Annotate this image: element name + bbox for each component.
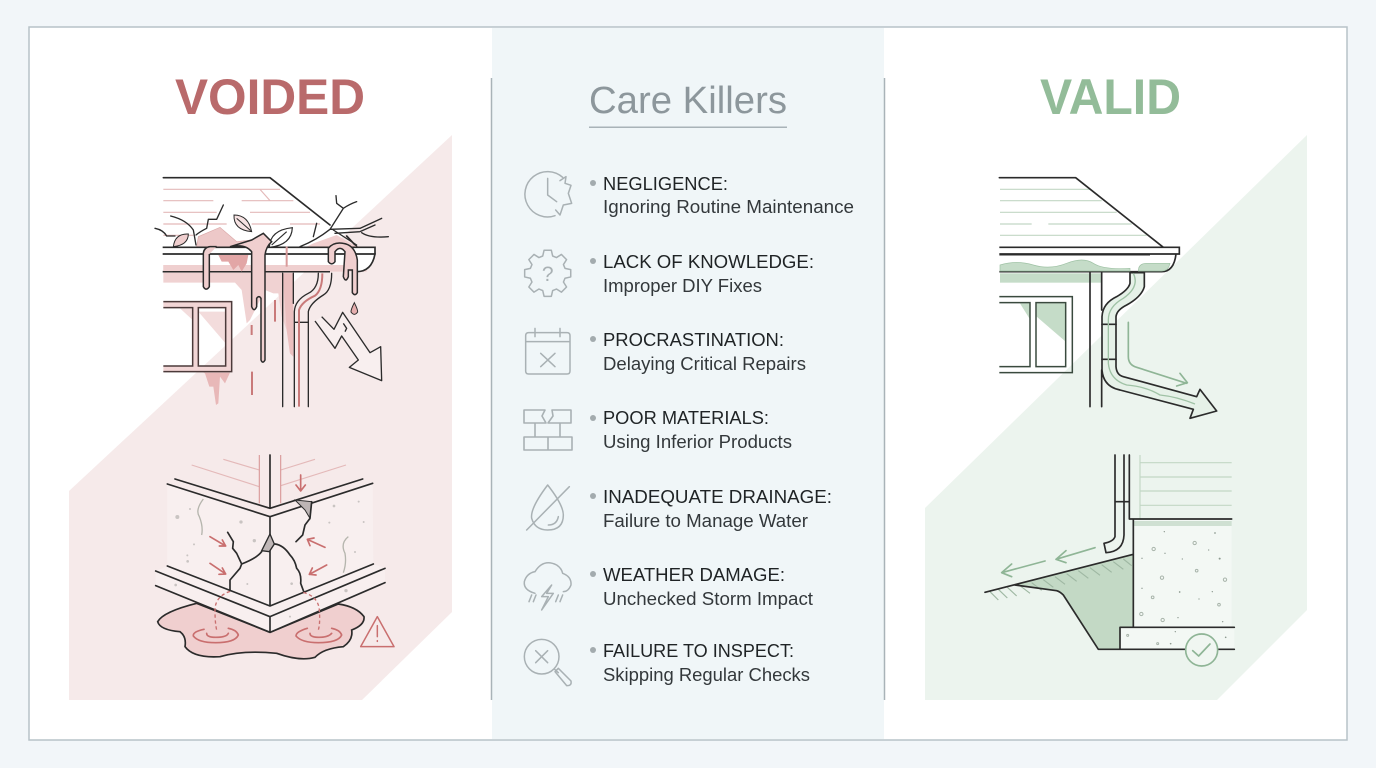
heading: valid: VALID [1040,69,1181,125]
panel: care killers list [524,80,854,686]
item: inadequate drainage [527,485,832,531]
heading: voided: VOIDED [175,69,365,125]
ripples [193,628,342,643]
item: inadequate drainage: Failure to Manage Water [603,511,808,531]
item: failure to inspect: FAILURE TO INSPECT: [603,641,794,661]
illustration: cracked foundation [156,455,394,659]
item: poor materials [524,408,792,452]
item: poor materials: POOR MATERIALS: [603,408,769,428]
illustration: clean gutter [999,178,1217,418]
item: negligence: NEGLIGENCE: [603,174,728,194]
item: lack of knowledge: ? [542,263,554,286]
icon: calendar [526,328,570,374]
item: negligence: Ignoring Routine Maintenance [603,197,854,217]
panel: centre column background [492,28,884,739]
icon: warning triangle [361,617,394,647]
icon: cracked bricks [524,410,572,450]
item: procrastination: PROCRASTINATION: [603,330,784,350]
icon: magnifier with cross [524,639,571,686]
icon: broken clock [525,172,572,217]
icon: check badge [1186,634,1218,666]
item: negligence [525,172,854,217]
icon: storm cloud [524,563,571,610]
item: failure to inspect [524,639,810,686]
valid background shape [925,135,1307,700]
item: procrastination [526,328,806,374]
item: weather damage [524,563,813,610]
item: failure to inspect: Skipping Regular Checks [603,665,810,685]
panel: valid [925,69,1307,700]
illustration: clogged gutter [155,178,388,407]
puddle [158,603,364,659]
item: lack of knowledge [525,250,814,296]
panel: voided [69,69,452,700]
item: weather damage: Unchecked Storm Impact [603,589,813,609]
voided background shape [69,135,452,700]
icon: broken arrow [315,312,382,381]
item: poor materials: Using Inferior Products [603,432,792,452]
downpipe [1102,273,1217,418]
icon: gear with question mark [525,250,571,296]
icon: crossed water drop [527,485,569,530]
heading: care killers: Care Killers [589,80,787,122]
walls [156,483,385,632]
item: lack of knowledge: LACK OF KNOWLEDGE: [603,252,814,272]
item: procrastination: Delaying Critical Repairs [603,354,806,374]
item: inadequate drainage: INADEQUATE DRAINAGE: [603,487,832,507]
flow arrow [1128,322,1187,386]
item: weather damage: WEATHER DAMAGE: [603,565,785,585]
item: lack of knowledge: Improper DIY Fixes [603,276,762,296]
illustration: graded foundation [985,455,1234,666]
